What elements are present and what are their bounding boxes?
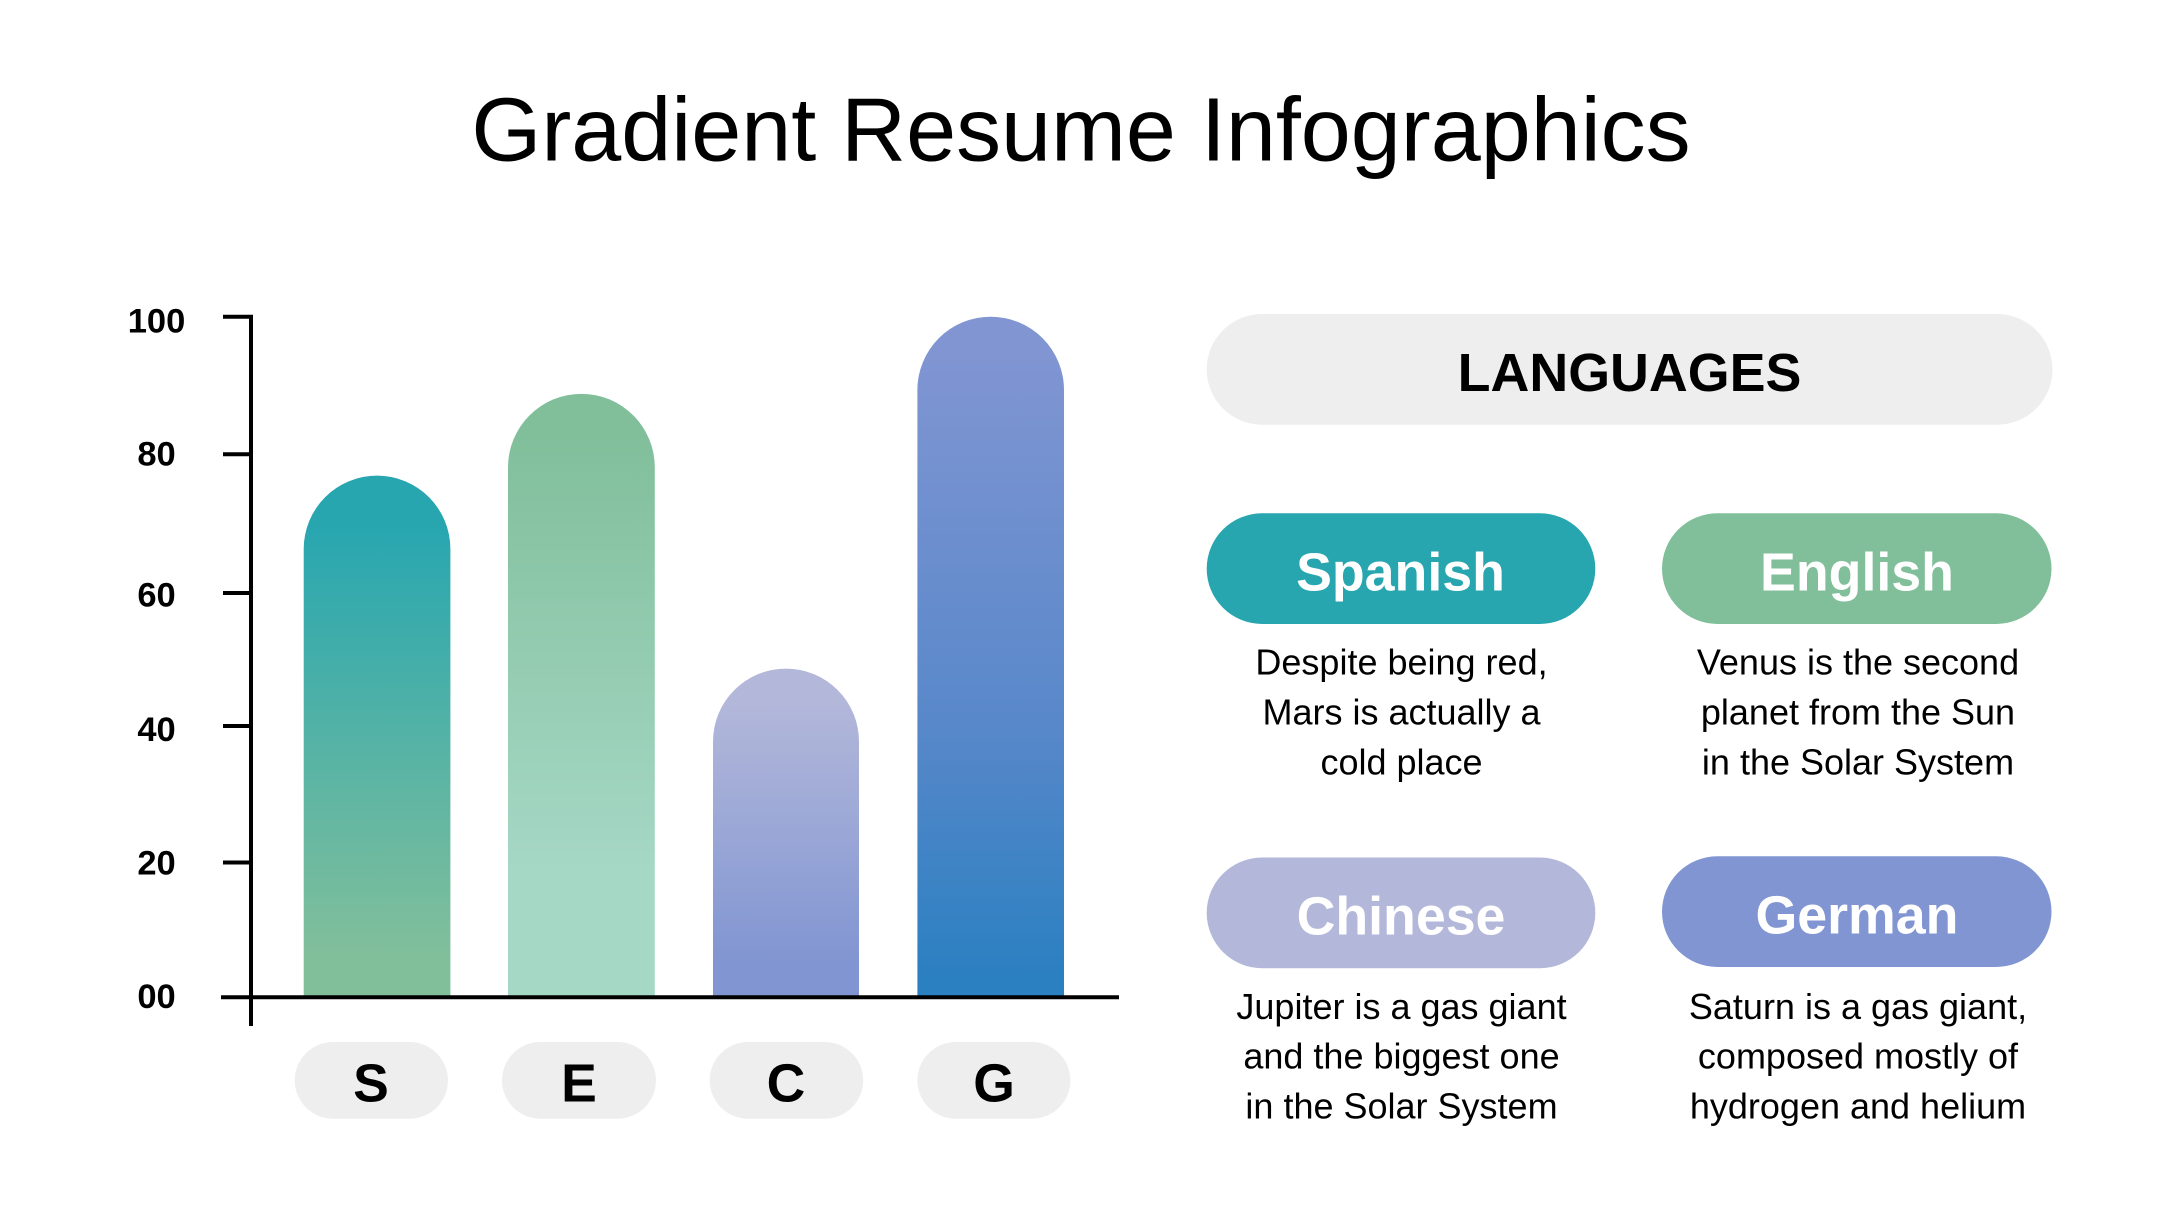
description: Spanish <box>1255 642 1548 782</box>
pill: Chinese <box>1207 858 1595 968</box>
description: English: in the Solar System <box>1702 741 2014 782</box>
category label: E <box>502 1042 656 1119</box>
panel: Spanish <box>1207 513 1595 782</box>
description: English: planet from the Sun <box>1701 692 2015 733</box>
panel: Chinese <box>1207 858 1595 1126</box>
description: English: Venus is the second <box>1697 642 2019 683</box>
y axis with ticks <box>221 315 1119 1026</box>
pill: English <box>1662 513 2052 624</box>
bar: E <box>508 394 655 996</box>
category label: C: C <box>767 1054 805 1114</box>
pill: Chinese: Chinese <box>1297 886 1505 946</box>
pill: English: English <box>1760 543 1954 603</box>
description: German: Saturn is a gas giant, <box>1689 986 2027 1027</box>
description: Spanish: cold place <box>1320 741 1483 782</box>
pill: Spanish: Spanish <box>1296 543 1505 603</box>
category label: G <box>917 1042 1070 1119</box>
category label: E: E <box>561 1054 597 1114</box>
bar chart <box>128 303 1119 1119</box>
description: Chinese: in the Solar System <box>1245 1086 1558 1126</box>
bar: G <box>917 317 1064 996</box>
y axis labels: 60 <box>137 577 176 615</box>
description: Chinese: Jupiter is a gas giant <box>1236 986 1567 1027</box>
y axis labels: 100 <box>128 303 185 341</box>
bar: S <box>304 476 450 996</box>
description: German: composed mostly of <box>1698 1036 2019 1077</box>
y axis labels: 00 <box>137 978 176 1016</box>
pill: German: German <box>1756 885 1958 945</box>
languages heading <box>1207 314 2052 425</box>
category label: C <box>710 1042 863 1119</box>
y axis labels: 80 <box>137 435 176 473</box>
pill: German <box>1662 856 2052 967</box>
bar: C <box>713 669 859 996</box>
description: Spanish: Mars is actually a <box>1262 692 1542 733</box>
panel: English <box>1662 513 2052 782</box>
description: German <box>1689 986 2027 1126</box>
languages heading: LANGUAGES <box>1458 343 1801 403</box>
description: English <box>1697 642 2019 782</box>
description: Spanish: Despite being red, <box>1255 642 1548 683</box>
panel: German <box>1662 856 2052 1126</box>
category label: G: G <box>973 1054 1015 1114</box>
category label: S: S <box>353 1054 389 1114</box>
y axis labels: 40 <box>137 711 176 749</box>
pill: Spanish <box>1207 513 1595 624</box>
title: Gradient Resume Infographics <box>471 81 1691 181</box>
y axis labels <box>128 303 185 1016</box>
description: German: hydrogen and helium <box>1690 1086 2026 1126</box>
description: Chinese <box>1236 986 1567 1126</box>
y axis labels: 20 <box>137 844 176 882</box>
category label: S <box>295 1042 448 1119</box>
description: Chinese: and the biggest one <box>1243 1036 1560 1077</box>
